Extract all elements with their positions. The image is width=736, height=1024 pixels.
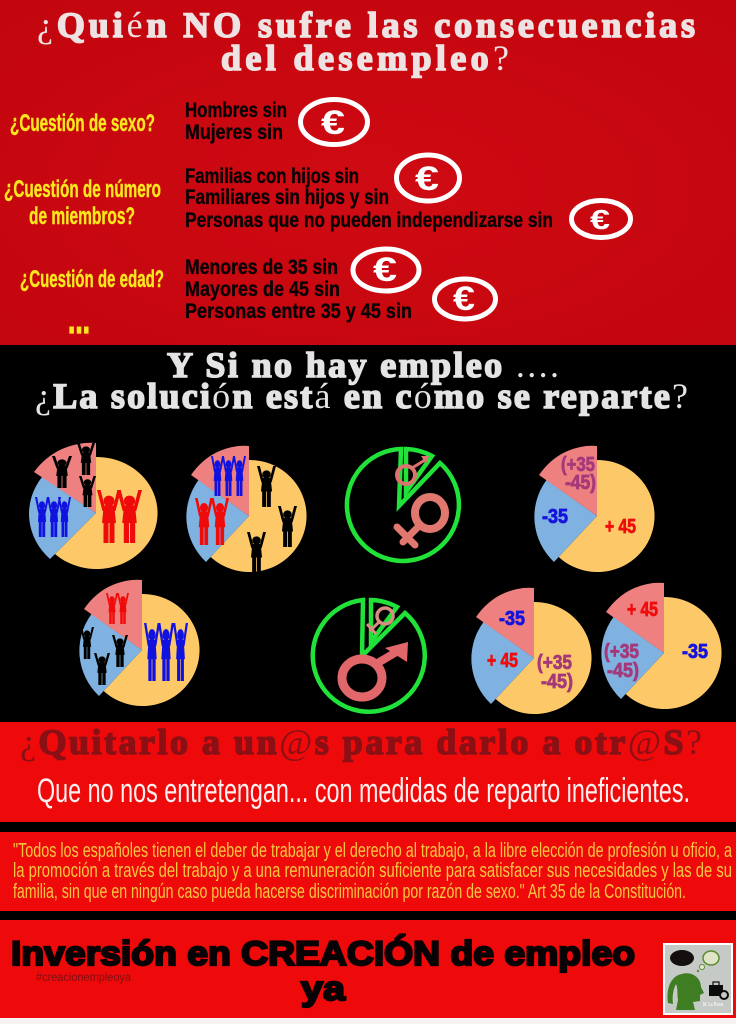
row: cuestión de edad: Personas entre 35 y 45 sin <box>185 300 412 323</box>
row: cuestión de número de miembros: Familias con hijos sin <box>185 165 359 188</box>
heading: solution question <box>35 345 688 416</box>
hashtag: #creacionempleoya <box>36 972 132 984</box>
icon: small male symbol <box>397 456 429 484</box>
title <box>37 5 695 78</box>
row: cuestión de número de miembros <box>4 155 630 238</box>
row: cuestión de edad: Mayores de 45 sin <box>185 278 340 301</box>
title: del desempleo? <box>221 38 509 78</box>
ellipsis: ... <box>68 298 90 342</box>
logo: M. La Rosa <box>703 1002 723 1008</box>
icon: large female symbol <box>397 497 445 545</box>
pie chart: age labels 3 <box>601 583 722 709</box>
row: cuestión de edad: € <box>373 251 397 289</box>
row: cuestión de sexo: Hombres sin <box>185 99 287 122</box>
pie chart: age labels 1: -35 <box>542 506 568 528</box>
pie chart: age labels 1: (+35 <box>561 454 595 476</box>
pie chart: age labels 3: -35 <box>682 641 708 663</box>
panel: top question section <box>0 0 736 345</box>
pie chart: age labels 1: -45) <box>565 472 596 494</box>
row: cuestión de número de miembros: € <box>415 160 439 198</box>
headline: Inversión en CREACIÓN de empleo <box>11 935 635 973</box>
panel: red call-out band <box>0 722 736 822</box>
row: cuestión de edad: ¿Cuestión de edad? <box>20 266 164 293</box>
pie chart: people 2 <box>186 446 307 573</box>
pie chart: age labels 3: + 45 <box>627 599 658 621</box>
logo <box>663 943 733 1015</box>
pie chart: gender outline, female majority <box>347 449 459 561</box>
title: ¿Quién NO sufre las consecuencias <box>37 5 695 45</box>
pie chart: people 1 <box>29 443 158 569</box>
row: cuestión de número de miembros: € <box>590 204 611 235</box>
pie chart: age labels 3: (+35 <box>604 641 639 663</box>
pie chart: age labels 1 <box>534 446 655 572</box>
pie chart: age labels 2: (+35 <box>537 652 572 674</box>
row: cuestión de número de miembros: Personas que no pueden independizarse sin <box>185 209 553 232</box>
pie chart: age labels 2: + 45 <box>487 650 518 672</box>
pie chart: age labels 2: -35 <box>499 608 525 630</box>
row: cuestión de sexo: Mujeres sin <box>185 121 283 144</box>
icon: small female symbol <box>367 608 393 634</box>
heading: solution question: Y Si no hay empleo .... <box>167 345 559 385</box>
panel: black distribution section <box>0 345 736 722</box>
panel: constitution quote <box>0 832 736 911</box>
row: cuestión de edad <box>20 249 496 323</box>
row: cuestión de número de miembros: de miembros? <box>29 203 135 230</box>
icon: large male symbol <box>342 642 408 697</box>
heading: quitarlo: ¿Quitarlo a un@s para darlo a otr@S? <box>20 722 702 762</box>
pie chart: age labels 2: -45) <box>541 671 573 693</box>
pie chart: age labels 1: + 45 <box>605 516 636 538</box>
row: cuestión de número de miembros: Familiares sin hijos y sin <box>185 186 389 209</box>
row: cuestión de edad: € <box>453 280 475 318</box>
pie chart: people 3 <box>79 580 200 706</box>
row: cuestión de número de miembros: ¿Cuestión de número <box>4 176 161 203</box>
panel: bottom call to action <box>0 920 736 1018</box>
row: cuestión de sexo <box>10 99 368 144</box>
row: cuestión de sexo: € <box>321 104 345 142</box>
heading: solution question: ¿La solución está en cómo se reparte? <box>35 376 688 416</box>
headline: ya <box>301 970 346 1008</box>
pie chart: age labels 3: -45) <box>607 660 639 682</box>
headline <box>11 935 635 1008</box>
pie chart: gender outline, male majority <box>313 600 425 712</box>
divider band <box>0 911 736 920</box>
row: cuestión de edad: Menores de 35 sin <box>185 256 338 279</box>
bottom edge <box>0 1018 736 1024</box>
pie chart: age labels 2 <box>471 588 592 714</box>
divider band <box>0 822 736 832</box>
row: cuestión de sexo: ¿Cuestión de sexo? <box>10 110 155 137</box>
